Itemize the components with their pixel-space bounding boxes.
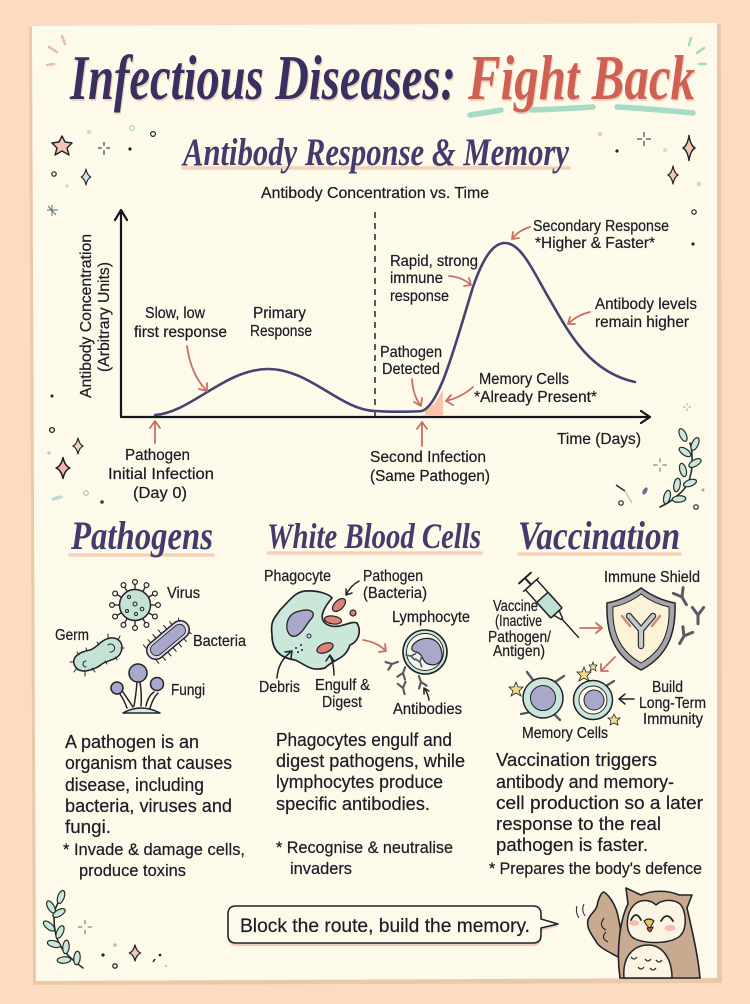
text: vaccination description: * Prepares the body's defence xyxy=(489,860,702,878)
title underline xyxy=(470,107,693,115)
panel: vaccination xyxy=(488,513,706,878)
label: long-term immunity: Long-Term xyxy=(639,695,706,712)
decorative sparkles upper xyxy=(47,126,701,411)
text: pathogen definition: fungi. xyxy=(65,816,111,837)
label: antibody levels: Antibody levels xyxy=(595,296,697,313)
label: bacteria: Bacteria xyxy=(193,633,246,650)
decorative sparkles right of chart xyxy=(616,458,704,509)
text: pathogen definition: * Invade & damage cells, xyxy=(63,841,245,859)
axes xyxy=(115,210,650,423)
label: long-term immunity: Build xyxy=(652,679,683,696)
label: virus: Virus xyxy=(167,585,200,602)
label: pathogen detected: Pathogen xyxy=(380,344,442,361)
second infection divider xyxy=(374,212,376,416)
title accent marks xyxy=(47,36,706,65)
panel: white blood cells xyxy=(259,516,481,878)
label: long-term immunity: Immunity xyxy=(643,711,703,728)
y axis label: (Arbitrary Units) xyxy=(96,262,113,372)
icon: fungi xyxy=(111,664,164,713)
label: phagocyte: Phagocyte xyxy=(264,568,331,585)
heading: white blood cells: White Blood Cells xyxy=(267,516,481,556)
label: memory cells: Memory Cells xyxy=(522,725,608,742)
label: engulf and digest: Digest xyxy=(322,694,363,711)
label: vaccine: Vaccine xyxy=(493,598,538,615)
text: pathogen definition: organism that causes xyxy=(65,752,232,773)
icon: bacteria xyxy=(140,613,196,667)
title: Infectious Diseases: xyxy=(69,42,456,113)
label: fungi: Fungi xyxy=(171,682,205,699)
memory cells highlight xyxy=(425,390,443,416)
icon: germ xyxy=(70,634,124,676)
label: engulf and digest: Engulf & xyxy=(315,677,371,694)
arrow: vaccine to shield xyxy=(580,623,602,633)
icon: lymphocyte xyxy=(403,630,447,674)
text: vaccination description xyxy=(489,749,703,878)
label: rapid response: Rapid, strong xyxy=(390,253,478,270)
label: pathogen detected xyxy=(380,344,442,406)
text: vaccination description: pathogen is faster. xyxy=(496,834,648,855)
label: antibody levels: remain higher xyxy=(595,314,689,331)
label: second infection: Second Infection xyxy=(370,449,486,466)
label: germ: Germ xyxy=(55,627,89,644)
label: antibody levels xyxy=(568,296,697,331)
section heading: antibody response: Antibody Response & Memory xyxy=(181,131,570,174)
chart subtitle: Antibody Concentration vs. Time xyxy=(261,185,489,202)
antibody curve xyxy=(155,243,635,415)
label: initial infection: Pathogen xyxy=(125,447,190,464)
icon: immune shield xyxy=(607,588,675,670)
text: white blood cell description: specific antibodies. xyxy=(276,793,430,814)
text: white blood cell description: Phagocytes engulf and xyxy=(276,729,452,750)
label: vaccine: (Inactive xyxy=(495,613,542,630)
label: memory cells: *Already Present* xyxy=(474,389,597,406)
label: debris: Debris xyxy=(259,679,300,696)
label: debris xyxy=(259,651,300,696)
label: initial infection: Initial Infection xyxy=(108,466,214,483)
icon: floating antibodies xyxy=(673,588,704,646)
label: pathogen detected: Detected xyxy=(382,361,440,378)
y axis label: Antibody Concentration xyxy=(78,234,95,398)
label: antibodies: Antibodies xyxy=(393,701,462,718)
label: engulf and digest xyxy=(315,655,371,711)
panel: pathogens xyxy=(55,513,246,880)
text: pathogen definition xyxy=(63,731,245,880)
text: pathogen definition: disease, including xyxy=(65,774,204,795)
label: x axis: Time (Days) xyxy=(557,431,641,448)
label: secondary response xyxy=(512,218,669,252)
icon: syringe xyxy=(518,571,586,644)
decorative sparkles left of chart xyxy=(47,428,104,504)
label: rapid response xyxy=(390,253,478,305)
text: white blood cell description: * Recognise & neutralise xyxy=(276,839,453,857)
label: second infection: (Same Pathogen) xyxy=(370,468,490,485)
icon: virus xyxy=(110,580,160,630)
label: long-term immunity xyxy=(639,679,706,728)
label: immune shield: Immune Shield xyxy=(604,569,700,586)
text: vaccination description: antibody and memory- xyxy=(496,771,674,792)
icon: right leaf sprig xyxy=(660,427,702,507)
text: vaccination description: Vaccination triggers xyxy=(496,749,657,770)
label: memory cells: Memory Cells xyxy=(479,371,569,388)
label: vaccine: Antigen) xyxy=(493,643,545,660)
text: pathogen definition: bacteria, viruses and xyxy=(65,795,232,816)
icon: left leaf sprig xyxy=(42,890,83,968)
arrow: phagocyte to lymphocyte xyxy=(363,640,386,652)
text: pathogen definition: A pathogen is an xyxy=(65,731,199,752)
decorative sparkles lower left xyxy=(78,920,167,968)
text: white blood cell description: invaders xyxy=(290,860,352,878)
icon: antibodies xyxy=(386,658,427,695)
arrow: long-term immunity xyxy=(619,694,634,704)
callout: speech bubble: Block the route, build the memory. xyxy=(240,916,530,937)
label: primary response: Primary xyxy=(253,305,306,322)
label: slow first response xyxy=(134,305,227,391)
label: pathogen bacteria: (Bacteria) xyxy=(363,585,427,602)
label: pathogen bacteria: Pathogen xyxy=(363,568,423,585)
arrow: shield to memory cells xyxy=(601,657,615,671)
icon: phagocyte xyxy=(272,591,359,669)
text: vaccination description: response to the real xyxy=(496,813,661,834)
text: white blood cell description xyxy=(276,729,465,878)
label: second infection xyxy=(370,422,490,485)
text: vaccination description: cell production so a later xyxy=(496,792,703,813)
label: slow first response: first response xyxy=(134,324,227,341)
label: slow first response: Slow, low xyxy=(145,305,206,322)
label: primary response xyxy=(250,305,312,340)
label: initial infection xyxy=(108,421,214,502)
label: initial infection: (Day 0) xyxy=(133,485,187,502)
callout: speech bubble xyxy=(228,906,559,946)
label: secondary response: *Higher & Faster* xyxy=(535,235,655,252)
label: antibodies xyxy=(393,688,462,718)
antibody line chart xyxy=(78,210,697,502)
icon: memory cells xyxy=(509,662,620,725)
label: primary response: Response xyxy=(250,323,312,340)
label: rapid response: immune xyxy=(390,270,443,287)
icon: owl mascot xyxy=(576,888,700,978)
heading: pathogens: Pathogens xyxy=(70,513,213,558)
text: pathogen definition: produce toxins xyxy=(79,862,186,880)
label: lymphocyte: Lymphocyte xyxy=(392,609,470,626)
heading: vaccination: Vaccination xyxy=(518,513,680,558)
label: vaccine: Pathogen/ xyxy=(488,629,552,646)
text: white blood cell description: digest pathogens, while xyxy=(276,750,465,771)
y axis label xyxy=(78,234,113,398)
label: vaccine xyxy=(488,598,552,660)
label: rapid response: response xyxy=(390,288,449,305)
label: memory cells xyxy=(446,371,597,406)
label: secondary response: Secondary Response xyxy=(533,218,669,235)
label: pathogen bacteria xyxy=(346,568,427,602)
text: white blood cell description: lymphocytes produce xyxy=(276,771,443,792)
